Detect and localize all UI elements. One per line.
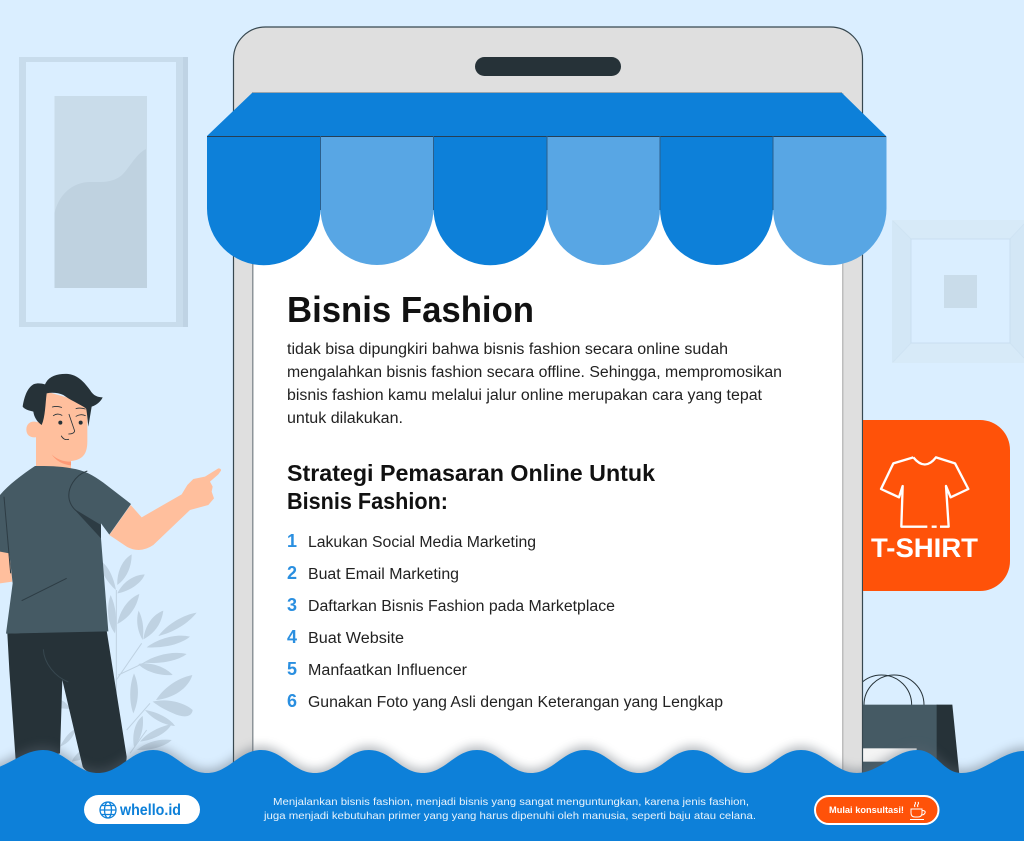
- consult button: [815, 796, 938, 824]
- awning: [207, 92, 886, 265]
- item 2: Buat Email Marketing: [308, 566, 459, 583]
- strategy heading: Strategi Pemasaran Online Untuk: [287, 460, 655, 486]
- face details: [52, 406, 85, 440]
- eyes: [58, 421, 83, 425]
- item 4: Buat Website: [308, 630, 404, 647]
- hair: [23, 374, 103, 427]
- plant behind the man: [60, 554, 197, 762]
- neck and face: [36, 392, 87, 470]
- neck shadow: [52, 454, 71, 465]
- trousers: [7, 631, 127, 775]
- strategy list: [287, 531, 723, 711]
- intro paragraph: bisnis fashion kamu melalui jalur online merupakan cara yang tepat: [287, 387, 763, 404]
- item 4: [287, 627, 404, 647]
- item 5: 5: [287, 659, 297, 679]
- shopping bag: [852, 675, 959, 775]
- far arm: [0, 551, 12, 583]
- item 2: 2: [287, 563, 297, 583]
- logo pill: whello.id: [119, 802, 181, 819]
- consult button: Mulai konsultasi!: [829, 805, 904, 816]
- icon: t-shirt: [881, 457, 968, 527]
- item 3: Daftarkan Bisnis Fashion pada Marketplace: [308, 598, 615, 615]
- item 5: Manfaatkan Influencer: [308, 662, 467, 679]
- footer text: [263, 796, 756, 822]
- phone body: [234, 27, 862, 841]
- strategy heading: Bisnis Fashion:: [287, 488, 448, 514]
- icon: globe: [100, 802, 116, 818]
- shirt lines: [4, 471, 87, 682]
- pointing arm: [109, 468, 221, 550]
- item 6: 6: [287, 691, 297, 711]
- intro paragraph: mengalahkan bisnis fashion secara offline. Sehingga, mempromosikan: [287, 364, 782, 381]
- wall picture frame right: [892, 220, 1024, 363]
- t-shirt card: T-SHIRT: [871, 533, 979, 563]
- t-shirt: [0, 466, 131, 634]
- t-shirt card: [863, 420, 1010, 591]
- item 4: 4: [287, 627, 297, 647]
- footer text: Menjalankan bisnis fashion, menjadi bisnis yang sangat menguntungkan, karena jenis fashion,: [273, 796, 749, 808]
- footer wave shadow: [0, 746, 1024, 837]
- logo pill: [84, 795, 200, 824]
- title: Bisnis Fashion: [287, 289, 534, 330]
- phone notch: [475, 57, 621, 76]
- footer text: juga menjadi kebutuhan primer yang yang harus dipenuhi oleh manusia, seperti baju atau celana.: [263, 810, 756, 822]
- ear: [26, 422, 37, 437]
- strategy heading: [287, 460, 655, 514]
- man pointing: [0, 374, 221, 775]
- sleeve shadow: [73, 508, 101, 538]
- intro paragraph: untuk dilakukan.: [287, 410, 403, 427]
- item 6: Gunakan Foto yang Asli dengan Keterangan yang Lengkap: [308, 694, 723, 711]
- item 1: 1: [287, 531, 297, 551]
- footer wave: [0, 750, 1024, 841]
- wall picture frame left: [19, 57, 188, 327]
- item 3: 3: [287, 595, 297, 615]
- intro paragraph: tidak bisa dipungkiri bahwa bisnis fashion secara online sudah: [287, 341, 728, 358]
- icon: coffee cup: [910, 802, 925, 820]
- item 1: Lakukan Social Media Marketing: [308, 534, 536, 551]
- intro paragraph: [287, 341, 782, 427]
